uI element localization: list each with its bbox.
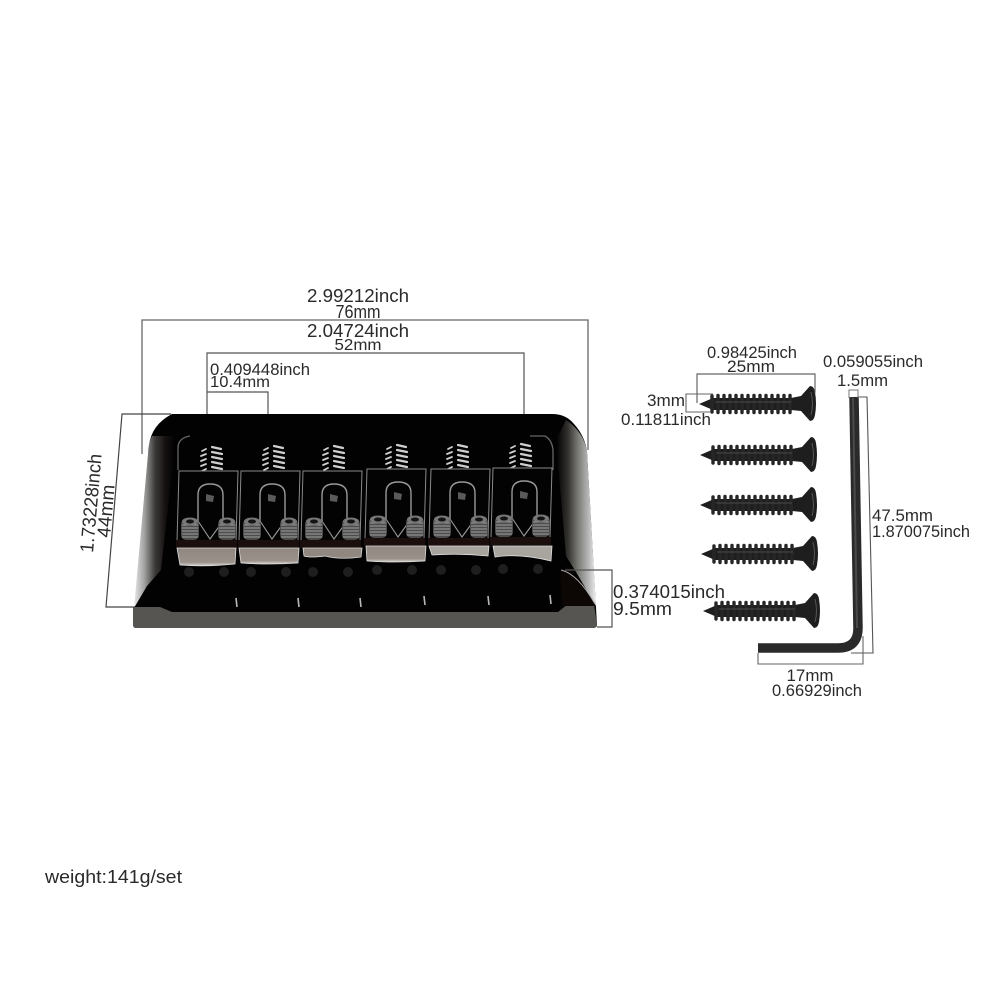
dimension: saddle spacing [207,361,310,414]
dimension: screw diameter [621,391,713,429]
dimension: string span: 2.04724inch [307,320,409,341]
dimension: hex key thickness: 0.059055inch [823,352,923,371]
dimension: hex key long arm [851,397,970,653]
weight note: weight:141g/set [44,866,182,887]
left side highlight [134,436,176,608]
right front wedge [560,566,596,606]
dimension: overall width: 2.99212inch [307,285,409,306]
right side highlight [556,420,596,606]
dimension: saddle spacing: 10.4mm [210,374,270,391]
dimension: depth: 44mm [94,484,120,538]
bridge illustration [133,414,597,628]
dimension: screw diameter: 0.11811inch [621,410,711,429]
dimension: string span [207,320,524,414]
dimension: overall width: 76mm [336,301,380,322]
dimension: hex key thickness: 1.5mm [837,371,888,390]
bottom front strip [133,604,597,628]
wedge highlight [561,570,595,604]
dimension: hex key short arm [758,636,863,700]
dimension: depth [77,414,171,607]
saddle plates [177,546,552,566]
dimension: hex key short arm: 0.66929inch [772,681,862,700]
dimension: hex key long arm: 47.5mm [872,506,933,525]
dimension: screw length: 0.98425inch [707,343,797,362]
dimension: hex key long arm: 1.870075inch [872,522,970,541]
inner recess outline [178,436,553,470]
dimension: height [565,570,725,627]
springs [201,447,222,471]
dimension: hex key thickness [823,352,923,398]
dimension: string span: 52mm [334,337,382,354]
dimension: height: 0.374015inch [613,581,725,602]
mounting screws [699,386,820,628]
dimension: depth: 1.73228inch [77,453,107,553]
dimension: hex key short arm: 17mm [786,666,834,685]
saddles [176,471,238,607]
dimension: screw length [697,343,815,403]
dimension: saddle spacing: 0.409448inch [210,361,310,379]
dimension: overall width [142,285,588,454]
bridge base body [133,414,597,628]
dimension: height: 9.5mm [613,598,672,619]
hex key [758,397,858,648]
dimension: screw diameter: 3mm [647,391,685,410]
dimension: screw length: 25mm [727,357,775,376]
